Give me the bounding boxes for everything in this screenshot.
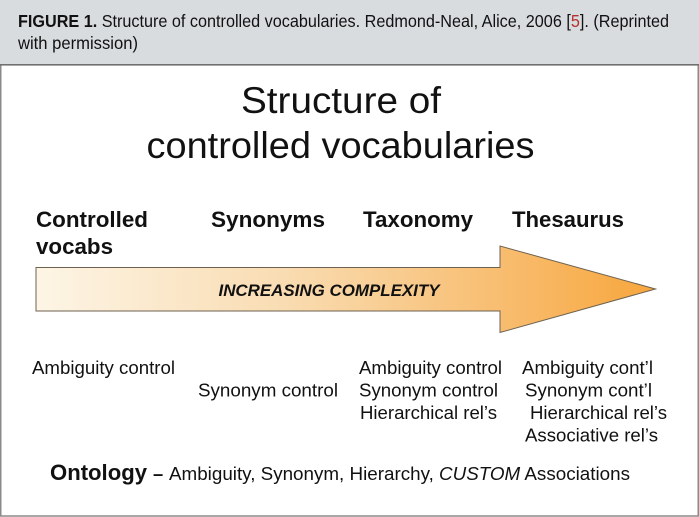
title: controlled vocabularies [146, 125, 534, 166]
feature lists [32, 357, 667, 446]
stage headings: vocabs [36, 234, 113, 259]
thesaurus features: Synonym cont’l [525, 380, 652, 400]
caption text [17, 11, 669, 53]
taxonomy features: Ambiguity control [359, 357, 502, 378]
arrow: increasing complexity [36, 246, 656, 332]
arrow: increasing complexity: INCREASING COMPLEXITY [218, 281, 441, 300]
caption banner [0, 0, 699, 66]
stage headings [36, 207, 624, 259]
taxonomy features: Hierarchical rel’s [360, 402, 497, 423]
controlled vocabs features: Ambiguity control [32, 357, 175, 378]
taxonomy features [359, 357, 502, 423]
thesaurus features: Hierarchical rel’s [530, 402, 667, 423]
stage headings: Controlled [36, 207, 148, 232]
stage headings: Taxonomy [363, 207, 474, 232]
ontology summary: – [153, 463, 163, 484]
title [146, 80, 534, 166]
taxonomy features: Synonym control [359, 380, 498, 400]
ontology summary: Ontology [50, 460, 148, 485]
caption text: FIGURE 1. Structure of controlled vocabularies. Redmond-Neal, Alice, 2006 [5]. (Reprinted [18, 11, 669, 31]
stage headings: Synonyms [211, 207, 325, 232]
title: Structure of [241, 80, 442, 121]
ontology summary [50, 460, 630, 485]
stage headings: Thesaurus [512, 207, 624, 232]
caption text: with permission) [17, 33, 138, 53]
thesaurus features: Ambiguity cont’l [522, 357, 653, 378]
ontology summary: Ambiguity, Synonym, Hierarchy, CUSTOM Associations [169, 463, 630, 484]
synonyms features: Synonym control [198, 380, 338, 400]
thesaurus features [522, 357, 667, 446]
thesaurus features: Associative rel’s [525, 424, 658, 446]
